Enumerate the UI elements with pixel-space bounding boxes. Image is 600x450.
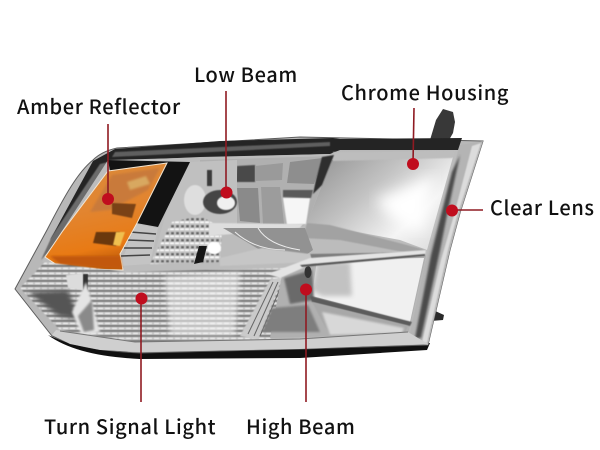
lower black housing edge bbox=[48, 335, 430, 359]
inner reflector bowl bbox=[42, 150, 458, 272]
panel grey part bbox=[312, 262, 352, 296]
amber top tint bbox=[90, 168, 160, 212]
outer lens body bbox=[15, 137, 483, 353]
chrome dark stripe bbox=[415, 155, 460, 338]
grey panel top bbox=[255, 163, 283, 181]
crystal facets bbox=[72, 282, 100, 336]
bright centre bbox=[165, 272, 240, 335]
black facet bbox=[194, 246, 207, 264]
dark curved edge bbox=[313, 155, 334, 194]
top black trim bbox=[50, 138, 462, 240]
lower foot bracket bbox=[431, 310, 444, 321]
amber inset 1 bbox=[127, 176, 150, 190]
amber bottom band bbox=[50, 256, 122, 268]
amber inset glow bbox=[113, 232, 125, 246]
lower low beam curve bbox=[223, 228, 313, 255]
reflector lower shelf bbox=[303, 223, 426, 256]
crystal shade bbox=[78, 300, 94, 332]
text: Clear Lens bbox=[490, 192, 595, 221]
headlight assembly bbox=[15, 109, 483, 359]
amber inset 3 bbox=[93, 232, 120, 246]
turn signal lens bbox=[20, 262, 290, 342]
white lower right bbox=[283, 198, 310, 225]
top trim grey stripe bbox=[112, 142, 330, 157]
high beam area bbox=[262, 250, 426, 338]
arc lines bbox=[235, 228, 300, 250]
diagonal shelf bbox=[310, 296, 412, 326]
bulb socket bbox=[203, 190, 237, 214]
dark corner panel bbox=[236, 165, 255, 182]
diagonal crystal bbox=[240, 277, 283, 340]
foot reflector bbox=[312, 302, 408, 336]
dot bbox=[136, 292, 148, 304]
fin stripes bbox=[121, 232, 156, 256]
infographic: headlight anatomy bbox=[14, 68, 594, 439]
panel backdrop bbox=[200, 156, 333, 228]
leader line bbox=[413, 108, 414, 164]
strip edge bbox=[60, 331, 408, 342]
large right reflector bbox=[307, 157, 453, 250]
white blob bbox=[207, 242, 221, 254]
bracket shade bbox=[83, 274, 88, 290]
mounting tab bbox=[430, 109, 455, 140]
white sweep bbox=[268, 250, 426, 278]
shelf edge bbox=[310, 252, 425, 262]
label: Turn Signal Light bbox=[44, 292, 216, 440]
bright panel bbox=[312, 258, 424, 322]
lower facets right bbox=[220, 248, 312, 266]
left grey shade bbox=[28, 290, 80, 320]
amber inset 2 bbox=[112, 203, 136, 218]
leader line bbox=[107, 124, 109, 199]
grey panel lower mid bbox=[261, 187, 284, 224]
bulb chrome bbox=[152, 160, 237, 262]
leader line bbox=[305, 289, 307, 402]
dark shadow bbox=[262, 305, 320, 332]
text: Amber Reflector bbox=[17, 91, 181, 120]
white fins bbox=[120, 224, 158, 266]
bulb socket bbox=[304, 266, 312, 278]
dot bbox=[300, 284, 312, 296]
dot bbox=[220, 186, 232, 198]
chrome highlight bbox=[422, 143, 481, 343]
leader line bbox=[452, 209, 483, 211]
dark band bbox=[283, 190, 313, 198]
leader line bbox=[140, 298, 142, 402]
grey panel lower left bbox=[237, 188, 260, 223]
label: Chrome Housing bbox=[341, 77, 509, 170]
foot white bbox=[322, 312, 404, 335]
thin dark divider bbox=[300, 254, 425, 267]
socket ring bbox=[217, 196, 235, 210]
white shelf bbox=[209, 223, 303, 236]
text: Low Beam bbox=[194, 59, 298, 88]
amber body bbox=[45, 163, 167, 270]
dot bbox=[407, 158, 419, 170]
text: High Beam bbox=[246, 411, 355, 440]
socket shade bbox=[284, 270, 314, 304]
low beam panels bbox=[150, 155, 334, 264]
dense facets bbox=[150, 216, 222, 264]
amber reflector lens bbox=[45, 163, 167, 270]
reflector bright sheen bbox=[375, 175, 435, 232]
text: Chrome Housing bbox=[341, 77, 509, 106]
dot bbox=[446, 204, 458, 216]
label: Clear Lens bbox=[446, 192, 595, 221]
chrome rod at top of reflector bbox=[333, 151, 455, 161]
bulb body bbox=[184, 185, 206, 215]
label: Low Beam bbox=[194, 59, 298, 198]
chrome side trim bbox=[408, 141, 483, 345]
signal body bbox=[20, 262, 290, 342]
text: Turn Signal Light bbox=[44, 411, 216, 440]
dot bbox=[102, 193, 114, 205]
leader line bbox=[225, 91, 227, 192]
dark stem bbox=[207, 170, 212, 186]
label: Amber Reflector bbox=[17, 91, 181, 205]
left inner band bbox=[41, 162, 108, 260]
left bracket bbox=[66, 273, 86, 290]
high beam backdrop bbox=[270, 256, 426, 338]
crystal lines bbox=[248, 282, 282, 336]
label: High Beam bbox=[246, 284, 355, 440]
upper right panel bbox=[287, 158, 323, 184]
bottom chrome strip bbox=[52, 330, 428, 352]
black block behind amber bbox=[108, 160, 190, 227]
